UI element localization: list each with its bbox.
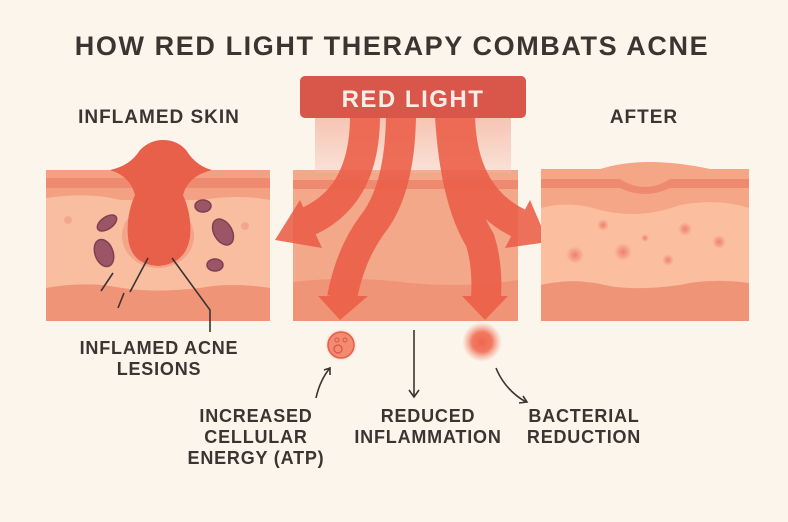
label: ATP: INCREASED <box>199 406 313 426</box>
panel: treatment <box>275 116 548 321</box>
icon: cell <box>325 329 357 361</box>
panel: inflamed skin <box>46 140 270 321</box>
arrows to labels <box>316 330 527 403</box>
callout lines <box>101 258 210 332</box>
label: inflamed acne lesions: LESIONS <box>117 359 201 379</box>
light beam <box>315 118 511 173</box>
title: HOW RED LIGHT THERAPY COMBATS ACNE <box>75 31 709 61</box>
icon: bacteria glow <box>462 322 502 362</box>
bacteria <box>91 200 238 271</box>
acne lesion <box>110 140 212 268</box>
arrows <box>275 116 548 320</box>
heading: inflamed skin: INFLAMED SKIN <box>78 107 240 128</box>
label: reduced inflammation: REDUCED <box>381 406 475 426</box>
label: inflamed acne lesions: INFLAMED ACNE <box>80 338 238 358</box>
label: ATP: CELLULAR <box>204 427 308 447</box>
panel: after <box>541 162 749 321</box>
heading: after: AFTER <box>610 107 678 128</box>
label: ATP: ENERGY (ATP) <box>188 448 324 468</box>
red light label: RED LIGHT <box>342 86 484 113</box>
label: bacterial reduction: REDUCTION <box>527 427 641 447</box>
red light label <box>300 76 526 118</box>
label: reduced inflammation: INFLAMMATION <box>354 427 502 447</box>
label: bacterial reduction: BACTERIAL <box>528 406 640 426</box>
